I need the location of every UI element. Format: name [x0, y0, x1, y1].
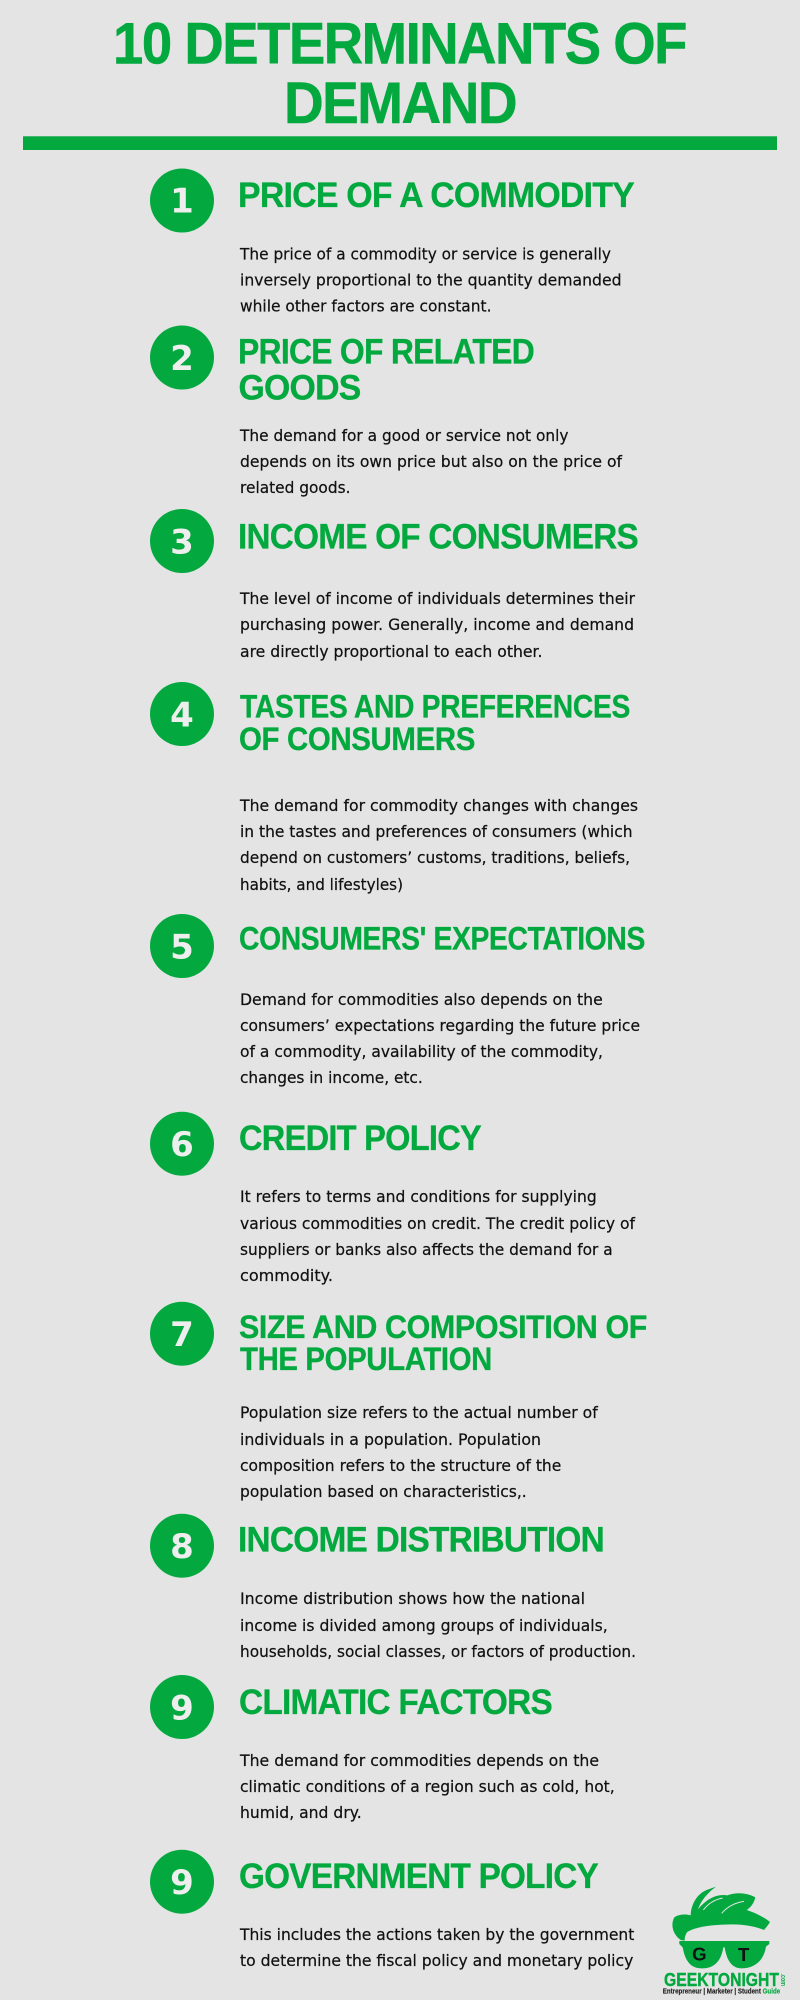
heading: tastes and preferences of consumers: OF CONSUMERS [239, 721, 475, 757]
body text 7: composition refers to the structure of the [240, 1456, 561, 1475]
heading: price of related goods: PRICE OF RELATED [238, 332, 534, 371]
icon: number 2 badge [150, 326, 214, 390]
icon: number 8 badge [150, 1514, 214, 1578]
body text 9: humid, and dry. [240, 1803, 362, 1822]
body text 6: commodity. [240, 1266, 333, 1285]
icon: number 9 badge (second): 9 [170, 1863, 194, 1903]
logo wordmark: GEEKTONIGHT [664, 1970, 779, 1990]
icon: number 3 badge [150, 509, 214, 573]
body text 1: inversely proportional to the quantity demanded [240, 270, 622, 289]
body text 4 [239, 796, 638, 894]
body text 8: households, social classes, or factors of production. [240, 1642, 636, 1661]
panel: determinant 7 [150, 1302, 647, 1501]
title: 10 DETERMINANTS OF [113, 11, 686, 76]
body text 10 [239, 1925, 634, 1970]
panel: determinant 2 [150, 326, 622, 497]
heading: price of related goods: GOODS [238, 368, 360, 407]
icon: sunglasses [679, 1941, 769, 1968]
icon: number 1 badge: 1 [170, 182, 194, 222]
body text 5 [240, 990, 640, 1087]
body text 6: suppliers or banks also affects the demand for a [240, 1240, 613, 1259]
heading: price of a commodity: PRICE OF A COMMODITY [238, 176, 634, 215]
heading: consumers' expectations: CONSUMERS' EXPECTATIONS [239, 920, 645, 956]
heading: tastes and preferences of consumers: TASTES AND PREFERENCES [240, 688, 630, 724]
body text 8: Income distribution shows how the national [240, 1589, 585, 1608]
body text 4: depend on customers’ customs, traditions, beliefs, [240, 848, 630, 867]
body text 7: Population size refers to the actual number of [240, 1403, 598, 1422]
body text 2: related goods. [240, 478, 350, 497]
icon: number 4 badge: 4 [170, 696, 194, 736]
body text 1: while other factors are constant. [240, 296, 492, 315]
icon: number 9 badge (second) [150, 1850, 214, 1914]
icon: number 9 badge [150, 1675, 214, 1739]
body text 2: depends on its own price but also on the price of [240, 452, 622, 471]
panel: determinant 10 [150, 1850, 634, 1970]
body text 1 [239, 244, 622, 315]
icon: number 4 badge [150, 682, 214, 746]
icon: number 2 badge: 2 [170, 339, 194, 379]
heading: size and composition of the population: THE POPULATION [240, 1341, 492, 1377]
icon: sunglasses: G [692, 1943, 707, 1964]
panel: determinant 6 [150, 1112, 635, 1285]
panel: determinant 9 [150, 1675, 615, 1822]
heading: income distribution: INCOME DISTRIBUTION [238, 1521, 604, 1560]
logo: geektonight [663, 1887, 786, 1996]
body text 5: consumers’ expectations regarding the future price [240, 1016, 640, 1035]
body text 6: It refers to terms and conditions for supplying [240, 1187, 597, 1206]
icon: sunglasses: T [738, 1944, 750, 1965]
title: DEMAND [284, 71, 516, 136]
body text 4: The demand for commodity changes with changes [239, 796, 638, 815]
icon: number 8 badge: 8 [170, 1527, 194, 1567]
body text 6 [240, 1187, 635, 1285]
title [113, 11, 686, 136]
body text 4: habits, and lifestyles) [240, 875, 403, 894]
logo tagline: Entrepreneur | Marketer | Student Guide [663, 1987, 780, 1996]
heading: government policy: GOVERNMENT POLICY [239, 1857, 598, 1896]
heading: size and composition of the population: SIZE AND COMPOSITION OF [239, 1309, 647, 1345]
logo domain suffix: .com [779, 1974, 786, 1986]
body text 3 [239, 589, 635, 661]
icon: hair [672, 1887, 770, 1941]
body text 4: in the tastes and preferences of consumers (which [240, 822, 632, 841]
body text 5: Demand for commodities also depends on the [240, 990, 603, 1009]
heading: climatic factors: CLIMATIC FACTORS [239, 1683, 552, 1722]
body text 9: climatic conditions of a region such as cold, hot, [240, 1777, 615, 1796]
icon: number 6 badge: 6 [170, 1125, 194, 1165]
body text 8 [240, 1589, 636, 1661]
panel: determinant 3 [150, 509, 638, 661]
body text 10: to determine the fiscal policy and monetary policy [240, 1951, 633, 1970]
heading: size and composition of the population [239, 1309, 647, 1377]
panel: determinant 5 [150, 914, 645, 1087]
body text 7: individuals in a population. Population [240, 1430, 541, 1449]
body text 9 [239, 1751, 615, 1822]
heading: price of related goods [238, 332, 534, 407]
heading: income of consumers: INCOME OF CONSUMERS [238, 518, 638, 557]
body text 7 [240, 1403, 598, 1501]
body text 1: The price of a commodity or service is generally [239, 244, 611, 263]
body text 7: population based on characteristics,. [240, 1482, 527, 1501]
body text 6: various commodities on credit. The credit policy of [240, 1214, 635, 1233]
panel: determinant 1 [150, 168, 634, 315]
panel: determinant 8 [150, 1514, 636, 1661]
icon: number 5 badge [150, 914, 214, 978]
body text 2 [239, 426, 622, 497]
body text 2: The demand for a good or service not only [239, 426, 568, 445]
panel: determinant 4 [150, 682, 638, 894]
body text 5: of a commodity, availability of the commodity, [240, 1042, 603, 1061]
icon: number 6 badge [150, 1112, 214, 1176]
icon: number 1 badge [150, 168, 214, 232]
icon: number 7 badge [150, 1302, 214, 1366]
icon: number 9 badge: 9 [170, 1688, 194, 1728]
title divider bar [23, 136, 777, 150]
body text 10: This includes the actions taken by the government [239, 1925, 634, 1944]
body text 3: The level of income of individuals determines their [239, 589, 635, 608]
body text 3: are directly proportional to each other. [240, 642, 542, 661]
body text 5: changes in income, etc. [240, 1068, 423, 1087]
body text 3: purchasing power. Generally, income and demand [240, 615, 634, 634]
body text 9: The demand for commodities depends on the [239, 1751, 599, 1770]
body text 8: income is divided among groups of individuals, [240, 1616, 608, 1635]
icon: number 5 badge: 5 [170, 928, 194, 968]
heading: tastes and preferences of consumers [239, 688, 630, 757]
heading: credit policy: CREDIT POLICY [239, 1119, 481, 1158]
icon: number 7 badge: 7 [170, 1315, 194, 1355]
icon: number 3 badge: 3 [170, 522, 194, 562]
